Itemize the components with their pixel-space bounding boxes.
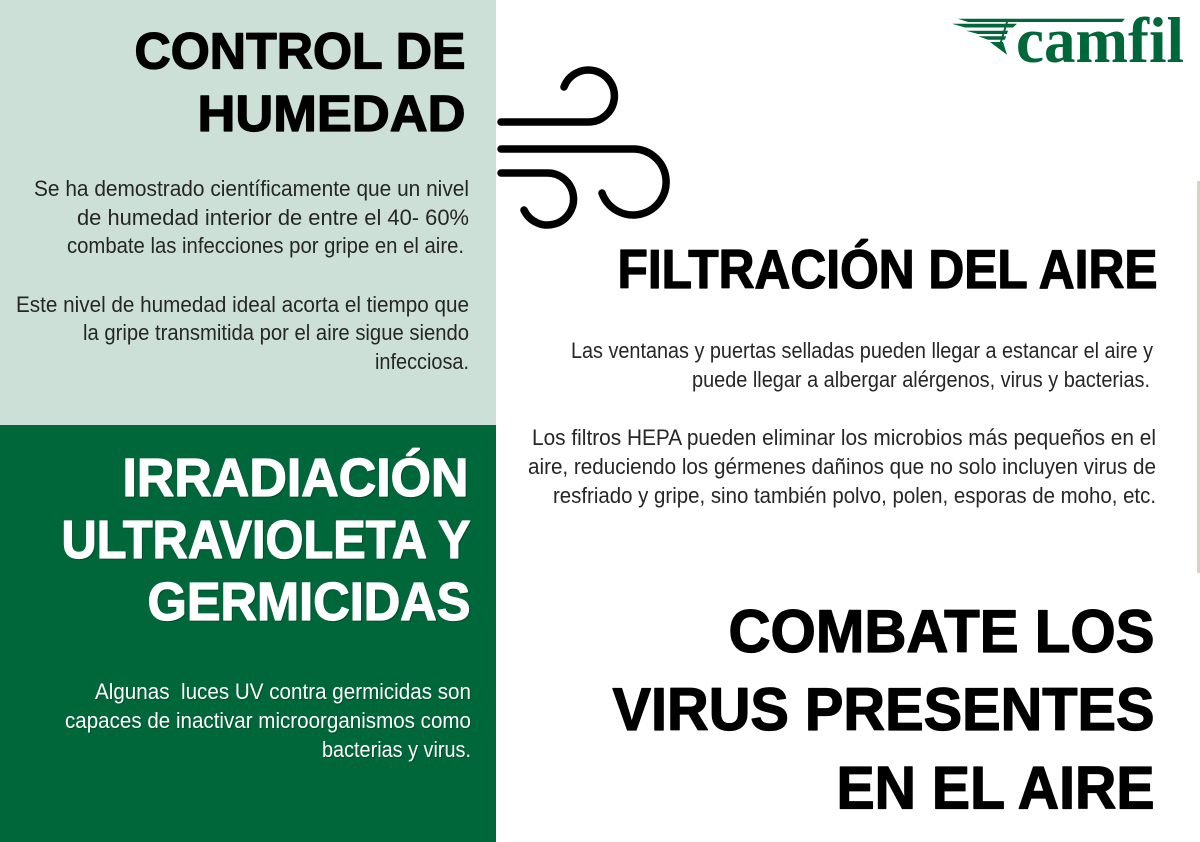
text block: filtración body: Las ventanas y puertas selladas pueden llegar a estancar el aire y: [571, 338, 1153, 363]
heading: control de humedad: CONTROL DE: [134, 22, 466, 80]
right edge strip: [1197, 181, 1200, 573]
title: combate los virus presentes en el aire: COMBATE LOS: [728, 598, 1154, 665]
heading: filtración del aire: FILTRACIÓN DEL AIRE: [618, 238, 1158, 300]
heading: irradiación ultravioleta y germicidas: ULTRAVIOLETA Y: [62, 510, 470, 570]
text block: luces UV body: Algunas luces UV contra germicidas son: [95, 679, 471, 704]
text block: luces UV body: [65, 679, 471, 762]
logo: camfil: camfil: [1016, 5, 1184, 77]
heading: control de humedad: [134, 22, 466, 142]
title: combate los virus presentes en el aire: EN EL AIRE: [836, 754, 1154, 822]
text block: filtración body: resfriado y gripe, sino también polvo, polen, esporas de moho, etc.: [553, 483, 1156, 508]
heading: irradiación ultravioleta y germicidas: [62, 448, 470, 632]
icon: wind: [501, 70, 666, 225]
text block: filtración body: puede llegar a albergar alérgenos, virus y bacterias.: [692, 367, 1150, 392]
title: combate los virus presentes en el aire: VIRUS PRESENTES: [612, 676, 1154, 743]
title: combate los virus presentes en el aire: [612, 598, 1154, 822]
heading: irradiación ultravioleta y germicidas: IRRADIACIÓN: [122, 448, 468, 508]
text block: filtración body: aire, reduciendo los gérmenes dañinos que no solo incluyen virus de: [528, 454, 1156, 479]
text block: humedad body: [16, 176, 469, 374]
text block: humedad body: Se ha demostrado científicamente que un nivel: [34, 176, 469, 201]
text block: filtración body: Los filtros HEPA pueden eliminar los microbios más pequeños en el: [532, 425, 1156, 450]
panel: irradiación ultravioleta background: [0, 425, 496, 842]
text block: humedad body: combate las infecciones por gripe en el aire.: [67, 233, 464, 258]
heading: irradiación ultravioleta y germicidas: GERMICIDAS: [148, 572, 470, 632]
text block: humedad body: Este nivel de humedad ideal acorta el tiempo que: [16, 292, 469, 317]
text block: luces UV body: bacterias y virus.: [322, 737, 471, 762]
text block: humedad body: infecciosa.: [375, 349, 469, 374]
panel: control de humedad background: [0, 0, 496, 425]
heading: control de humedad: HUMEDAD: [198, 85, 466, 142]
text block: filtración body: [528, 338, 1156, 508]
text block: humedad body: la gripe transmitida por el aire sigue siendo: [83, 320, 469, 345]
text block: humedad body: de humedad interior de entre el 40- 60%: [77, 205, 469, 230]
text block: luces UV body: capaces de inactivar microorganismos como: [65, 708, 471, 733]
